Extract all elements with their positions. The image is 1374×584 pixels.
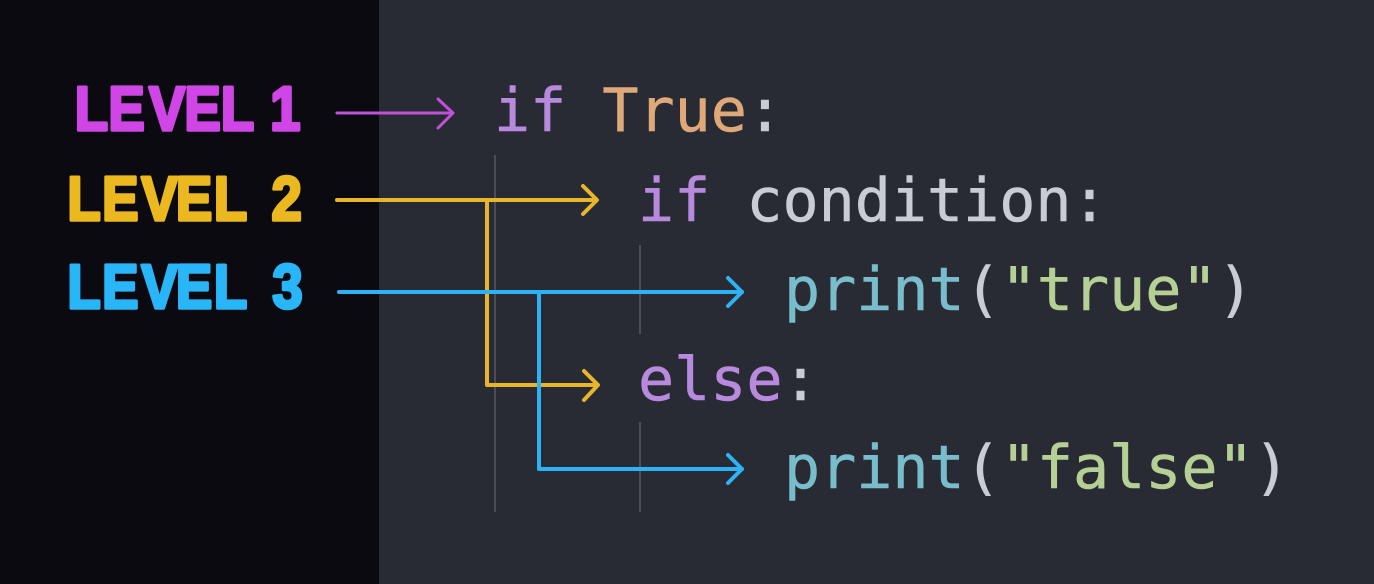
code line: print false: print("false") xyxy=(784,433,1290,503)
code line: print true: print("true") xyxy=(784,255,1254,325)
label: level 3: LEVEL 3 xyxy=(67,253,303,322)
code line: if True: if True: xyxy=(494,76,783,146)
panel: dark left sidebar xyxy=(0,0,379,584)
arrow: level 2 to else xyxy=(487,200,598,400)
code line: if condition: if condition: xyxy=(638,166,1108,236)
arrow: level 1 to if True xyxy=(337,99,453,128)
arrow: level 2 to if condition xyxy=(337,186,597,214)
arrow: level 3 to print true xyxy=(339,278,742,306)
label: level 1: LEVEL 1 xyxy=(75,75,300,144)
arrow: level 3 to print false xyxy=(539,292,742,483)
code line: else: else: xyxy=(638,345,819,415)
label: level 2: LEVEL 2 xyxy=(67,165,302,234)
